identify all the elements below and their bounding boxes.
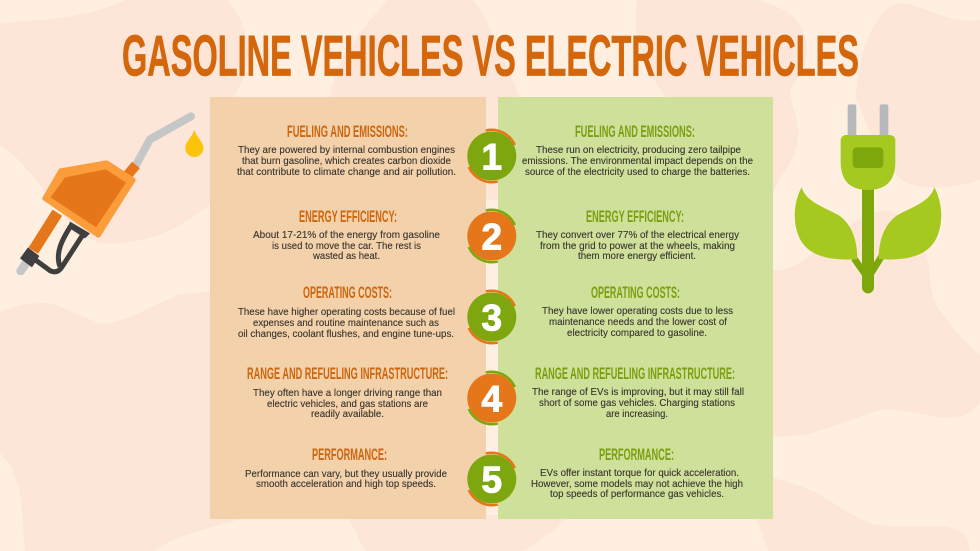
number badge 5 — [467, 453, 516, 505]
number badge 2: 2 — [482, 216, 502, 258]
text: energy efficiency (electric) — [536, 229, 740, 262]
text: fueling and emissions (gasoline): that contribute to climate change and air pollution. — [237, 166, 456, 178]
text: performance (electric): top speeds of performance gas vehicles. — [550, 488, 724, 500]
text: operating costs (gasoline): expenses and routine maintenance such as — [253, 317, 439, 329]
heading: performance (electric): PERFORMANCE: — [599, 446, 674, 464]
text: operating costs (electric): They have lower operating costs due to less — [542, 305, 733, 317]
number badge 3 — [467, 291, 516, 343]
heading: range and refueling infrastructure (electric): RANGE AND REFUELING INFRASTRUCTURE: — [535, 365, 735, 383]
heading: fueling and emissions (gasoline): FUELING AND EMISSIONS: — [287, 123, 408, 141]
text: energy efficiency (gasoline): wasted as heat. — [312, 250, 380, 262]
panel: electric vehicles — [498, 97, 773, 519]
text: operating costs (gasoline): oil changes, coolant flushes, and engine tune-ups. — [238, 328, 454, 340]
text: energy efficiency (gasoline): About 17-21% of the energy from gasoline — [253, 229, 440, 241]
number badge 1: 1 — [482, 136, 502, 178]
text: energy efficiency (electric): They convert over 77% of the electrical energy — [536, 229, 740, 241]
text: energy efficiency (electric): from the grid to power at the wheels, making — [540, 240, 735, 252]
text: range and refueling infrastructure (electric): The range of EVs is improving, but it may still fall — [532, 386, 744, 398]
text: performance (gasoline): smooth acceleration and high top speeds. — [256, 478, 436, 490]
text: range and refueling infrastructure (gasoline): They often have a longer driving range than — [253, 387, 442, 399]
heading: range and refueling infrastructure (gasoline): RANGE AND REFUELING INFRASTRUCTURE: — [247, 365, 448, 383]
text: operating costs (gasoline) — [238, 306, 455, 340]
number badge 1 — [467, 130, 516, 182]
text: range and refueling infrastructure (electric): short of some gas vehicles. Charging stations — [539, 397, 735, 409]
text: operating costs (electric): maintenance needs and the lower cost of — [549, 316, 727, 328]
text: operating costs (electric): electricity compared to gasoline. — [567, 327, 707, 339]
heading: energy efficiency (electric): ENERGY EFFICIENCY: — [586, 208, 684, 226]
text: performance (gasoline) — [245, 468, 447, 490]
heading: performance (gasoline): PERFORMANCE: — [312, 446, 387, 464]
number badge 5: 5 — [482, 460, 502, 500]
text: fueling and emissions (gasoline): that burn gasoline, which creates carbon dioxide — [242, 155, 451, 167]
number badge 2 — [467, 210, 516, 262]
heading: energy efficiency (gasoline): ENERGY EFFICIENCY: — [299, 208, 397, 226]
text: fueling and emissions (electric): source of the electricity used to charge the batteries. — [525, 166, 750, 178]
icon: plug with leaves — [795, 104, 941, 293]
text: fueling and emissions (gasoline) — [237, 144, 456, 178]
text: range and refueling infrastructure (gasoline) — [253, 387, 442, 420]
heading: operating costs (electric): OPERATING COSTS: — [591, 284, 680, 302]
number badge 4 — [467, 372, 516, 424]
text: energy efficiency (electric): them more energy efficient. — [578, 250, 696, 262]
number badge 4: 4 — [482, 378, 503, 420]
text: operating costs (gasoline): These have higher operating costs because of fuel — [238, 306, 455, 318]
text: fueling and emissions (electric) — [522, 144, 753, 178]
text: fueling and emissions (gasoline): They are powered by internal combustion engines — [238, 144, 455, 156]
icon: fuel pump nozzle with drop — [20, 116, 203, 272]
text: fueling and emissions (electric): These run on electricity, producing zero tailpipe — [536, 144, 741, 156]
heading: operating costs (gasoline): OPERATING COSTS: — [303, 284, 392, 302]
text: performance (electric): EVs offer instant torque for quick acceleration. — [540, 467, 739, 479]
text: range and refueling infrastructure (electric) — [532, 386, 744, 420]
text: energy efficiency (gasoline) — [253, 229, 440, 262]
text: range and refueling infrastructure (gasoline): readily available. — [311, 408, 384, 420]
text: range and refueling infrastructure (electric): are increasing. — [606, 408, 668, 420]
heading: fueling and emissions (electric): FUELING AND EMISSIONS: — [575, 123, 695, 141]
text: energy efficiency (gasoline): is used to move the car. The rest is — [272, 240, 421, 252]
text: range and refueling infrastructure (gasoline): electric vehicles, and gas stations are — [267, 398, 428, 410]
text: performance (electric): However, some models may not achieve the high — [531, 478, 743, 490]
text: performance (electric) — [531, 467, 743, 500]
text: fueling and emissions (electric): emissions. The environmental impact depends on the — [522, 155, 753, 167]
panel: gasoline vehicles — [210, 97, 486, 519]
number badge 3: 3 — [482, 298, 502, 338]
text: performance (gasoline): Performance can vary, but they usually provide — [245, 468, 447, 480]
text: operating costs (electric) — [542, 305, 733, 339]
